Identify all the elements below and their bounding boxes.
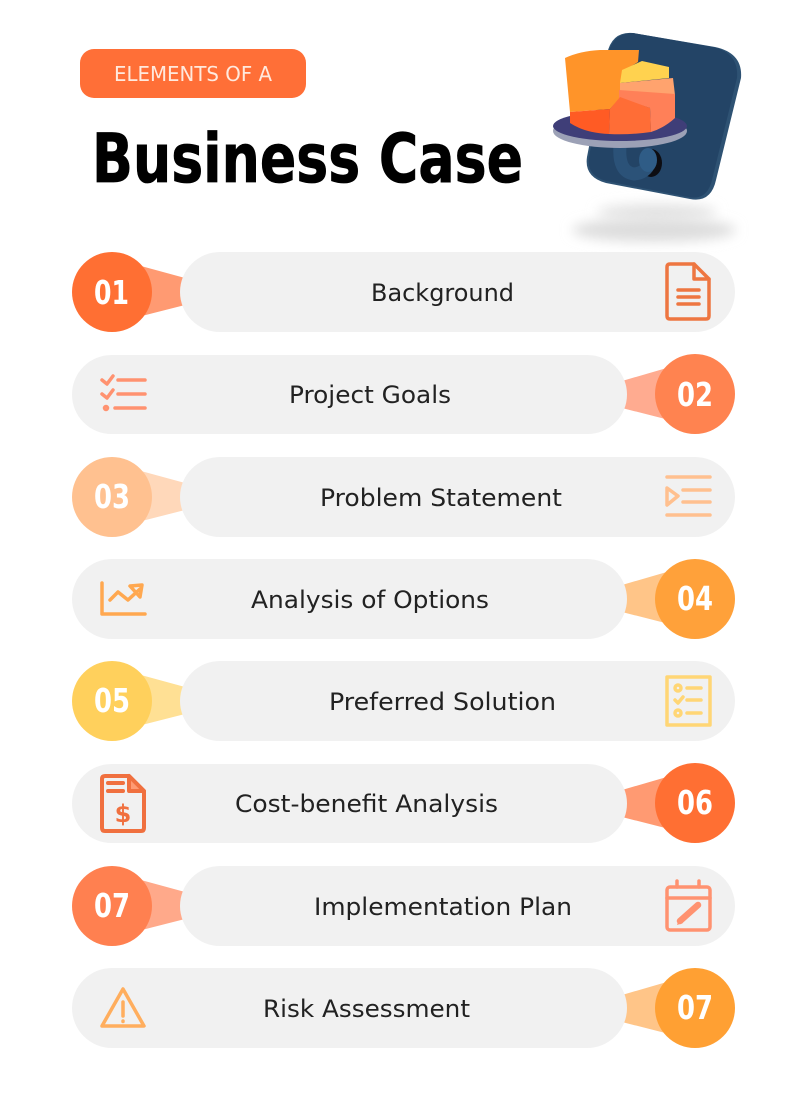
row 06: Cost-benefit Analysis — [72, 763, 735, 843]
row 07: Implementation Plan: Implementation Plan — [314, 893, 572, 921]
row 03: Problem Statement — [72, 457, 735, 537]
icon: invoice with dollar sign — [102, 776, 144, 831]
title: Business Case — [92, 120, 523, 199]
row 05: Preferred Solution — [72, 661, 735, 741]
row 01: Background: Background — [371, 279, 514, 307]
row 06: Cost-benefit Analysis: Cost-benefit Analysis — [235, 790, 498, 818]
icon: indent list — [667, 477, 710, 515]
row 07: Implementation Plan: 07 — [94, 886, 130, 925]
row 08: Risk Assessment: 07 — [677, 988, 713, 1027]
icon: warning triangle — [102, 989, 144, 1026]
badge: elements of a: ELEMENTS OF A — [114, 62, 272, 86]
row 03: Problem Statement: 03 — [94, 477, 130, 516]
row 02: Project Goals: Project Goals — [289, 381, 451, 409]
icon: form checklist — [667, 677, 710, 725]
row 04: Analysis of Options: 04 — [677, 579, 713, 618]
row 06: Cost-benefit Analysis: 06 — [677, 783, 713, 822]
row 05: Preferred Solution: Preferred Solution — [329, 688, 556, 716]
row 07: Implementation Plan — [72, 866, 735, 946]
row 04: Analysis of Options: Analysis of Options — [251, 586, 489, 614]
row 02: Project Goals: 02 — [677, 375, 713, 414]
icon: invoice with dollar sign: $ — [115, 800, 131, 828]
icon: checklist — [102, 376, 145, 410]
row 01: Background — [72, 252, 735, 332]
row 04: Analysis of Options — [72, 559, 735, 639]
row 08: Risk Assessment — [72, 968, 735, 1048]
icon: trend chart — [102, 583, 145, 614]
icon: calendar with pencil — [667, 881, 710, 930]
row 05: Preferred Solution: 05 — [94, 681, 130, 720]
row 03: Problem Statement: Problem Statement — [320, 484, 562, 512]
badge: elements of a — [80, 49, 306, 98]
icon: document — [667, 264, 709, 319]
row 01: Background: 01 — [94, 273, 129, 312]
row 08: Risk Assessment: Risk Assessment — [263, 995, 470, 1023]
row 02: Project Goals — [72, 354, 735, 434]
illustration: 3D pie chart on a dark tile — [553, 33, 741, 242]
